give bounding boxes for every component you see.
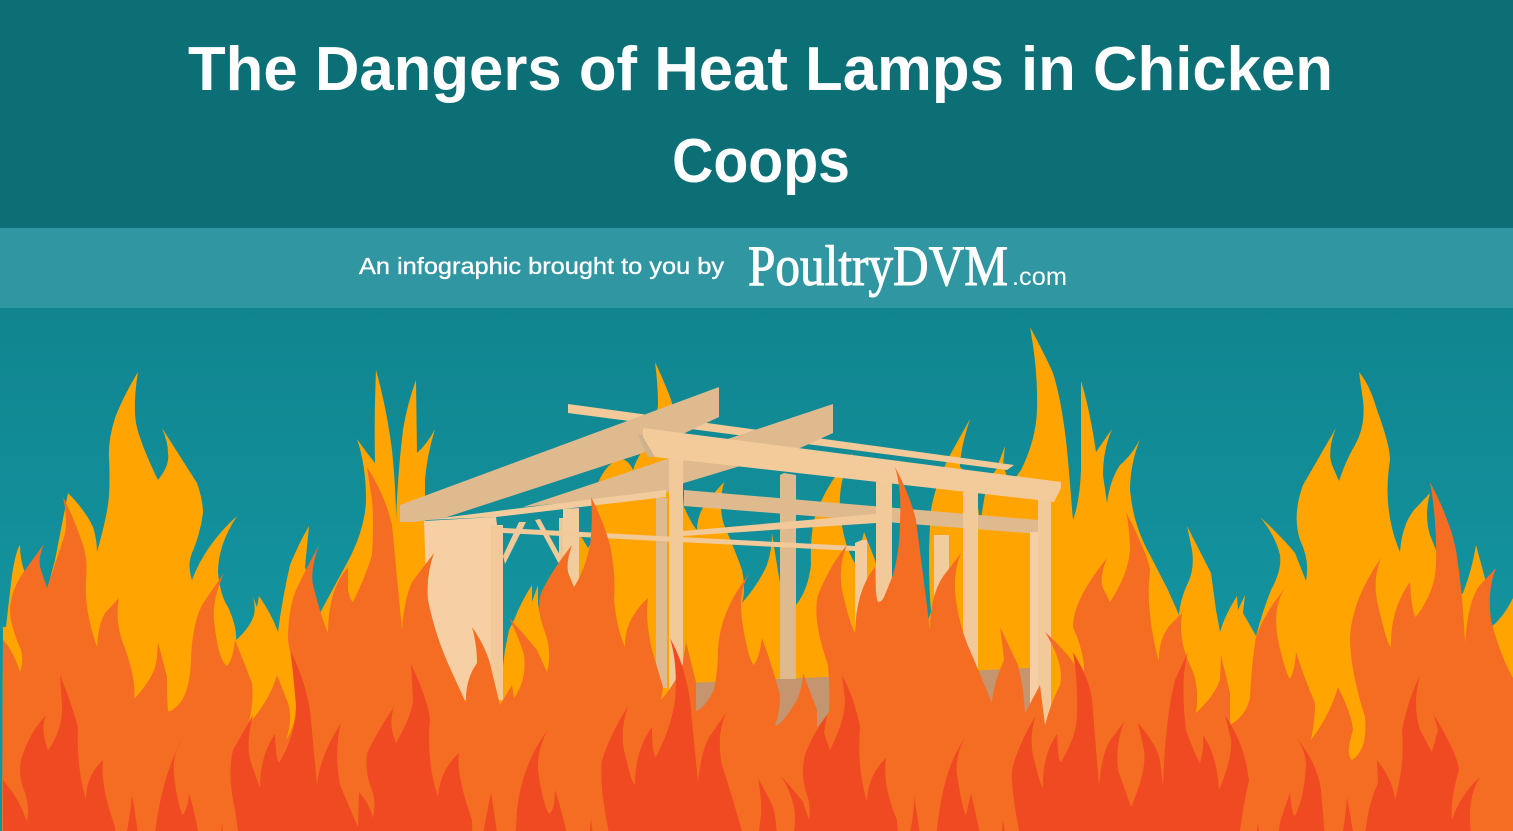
red flame: left wide — [230, 652, 473, 831]
title: Coops — [672, 127, 850, 196]
thin lower rail — [503, 528, 855, 551]
sky background — [0, 308, 1513, 831]
sponsor line: An infographic brought to you by — [359, 253, 724, 279]
right tan rafter — [523, 404, 833, 507]
front posts — [669, 459, 1051, 728]
floor — [688, 668, 1030, 780]
front beam shadow — [638, 435, 655, 457]
middle flames: orange — [2, 467, 1513, 831]
red flame: far right — [1363, 675, 1480, 831]
rear inner post — [656, 498, 667, 688]
red flame: right — [1275, 738, 1358, 831]
logo: PoultryDVM.com: PoultryDVM — [748, 235, 1008, 298]
red flame: center-right — [781, 675, 924, 831]
red flame: small tips — [478, 792, 596, 831]
left side rail — [425, 490, 666, 520]
thin diagonal rail — [683, 514, 876, 536]
front top beam — [643, 428, 1061, 502]
red flame: left — [3, 675, 116, 831]
red flame: center-left — [514, 731, 572, 831]
rear rail — [684, 490, 1038, 534]
red flame: right-center — [1012, 652, 1249, 831]
back top rail — [568, 404, 1014, 470]
left tan rafter — [400, 387, 719, 522]
rear posts — [559, 508, 949, 650]
red flame: left-center — [153, 738, 225, 831]
wall panel — [424, 517, 503, 700]
cross braces — [503, 522, 526, 564]
tan post — [780, 473, 796, 679]
sponsor band — [0, 228, 1513, 308]
red flame: center small — [755, 778, 778, 831]
logo: PoultryDVM.com: .com — [1012, 263, 1067, 291]
red flame: lower center — [935, 738, 1009, 831]
front flames: red — [3, 638, 1480, 831]
red flame: center — [601, 638, 750, 831]
title — [188, 35, 1333, 196]
red flame: small tip — [1254, 822, 1262, 831]
title: The Dangers of Heat Lamps in Chicken — [188, 35, 1333, 104]
back flames: yellow — [2, 327, 1513, 831]
red flame: small — [121, 795, 141, 831]
header band — [0, 0, 1513, 228]
coop frame — [400, 387, 1061, 780]
